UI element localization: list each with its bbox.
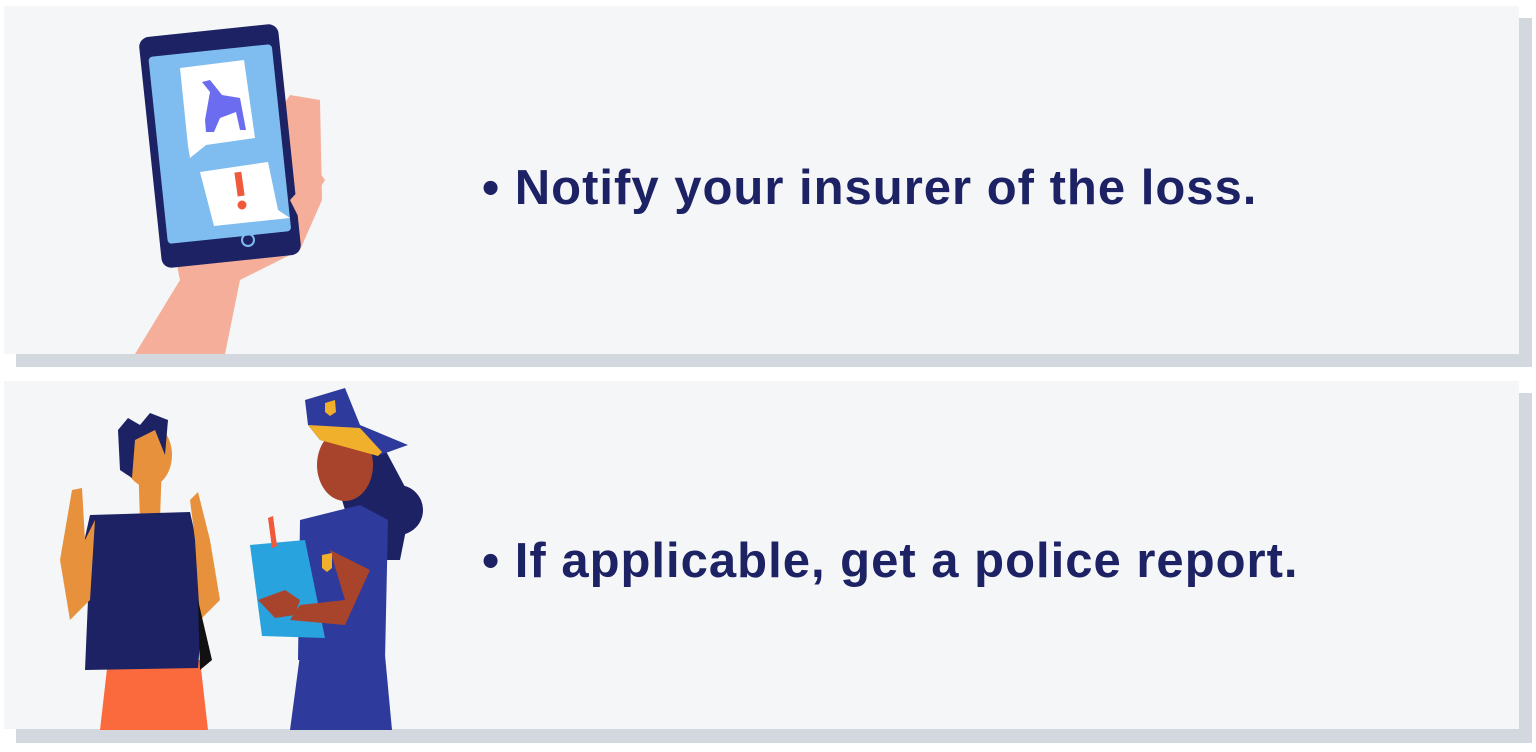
icon: hand holding phone [135,23,325,354]
icon: police officer [250,388,423,730]
panel shadow 2 [16,393,1532,743]
panel 1 [4,6,1519,354]
panel 2 [4,381,1519,729]
panel shadow 1 [16,18,1532,367]
text: notify insurer: • Notify your insurer of the loss. [482,161,1257,215]
icon: person talking [60,413,220,730]
text: police report: • If applicable, get a police report. [482,534,1299,588]
